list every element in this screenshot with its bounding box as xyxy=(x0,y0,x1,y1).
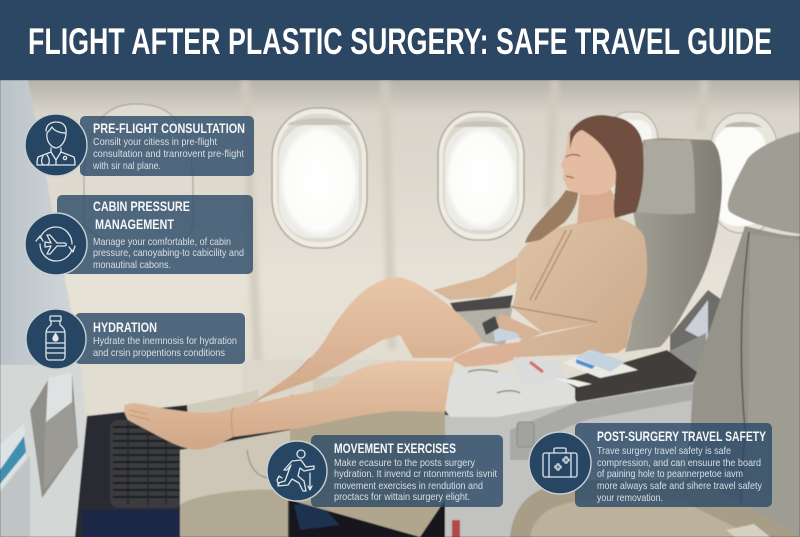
medical supplies xyxy=(513,350,638,387)
text block: pressure, canoyabing-to cabicility and xyxy=(93,247,244,259)
window xyxy=(606,112,658,202)
window xyxy=(438,112,524,240)
text block: Hydrate the inemnosis for hydration xyxy=(93,335,237,347)
text block: compression, and can ensuure the board xyxy=(597,457,761,469)
icon: first aid suitcase xyxy=(529,432,591,494)
title banner xyxy=(0,0,800,80)
center console xyxy=(445,350,697,537)
heading: HYDRATION xyxy=(93,319,157,335)
compression garment xyxy=(433,217,647,357)
heading: MOVEMENT EXERCISES xyxy=(334,440,456,456)
icon: plane with circular arrows xyxy=(25,213,87,275)
text block: Trave surgery travel safety is safe xyxy=(597,445,731,457)
text block: movement exercises in rendution and xyxy=(334,480,483,492)
text block: your removation. xyxy=(597,492,663,504)
icon: doctor xyxy=(25,114,87,176)
text block: more always safe and sihere travel safety xyxy=(597,480,763,492)
text block: and crsin propentions conditions xyxy=(93,347,225,359)
heading xyxy=(93,198,190,232)
heading: PRE-FLIGHT CONSULTATION xyxy=(93,120,245,136)
text block: proctacs for wittain surgery elight. xyxy=(334,491,470,503)
text block: Make ecasure to the posts surgery xyxy=(334,457,476,469)
leg rest cushion xyxy=(180,360,445,537)
text block: of paining hole to peannerpetoe iavm xyxy=(597,468,743,480)
text block: Manage your comfortable, of cabin xyxy=(93,236,231,248)
text block xyxy=(93,236,244,271)
panel: hydration xyxy=(26,309,245,369)
near seat xyxy=(505,132,800,537)
floor and vent xyxy=(75,400,450,537)
panel: cabin pressure management xyxy=(25,195,253,275)
window xyxy=(272,108,367,248)
text block: hydration. It invend cr ntonmments isvnit xyxy=(334,468,497,480)
text block: consultation and tranrovent pre-flight xyxy=(93,148,244,160)
text block xyxy=(92,136,244,172)
bent leg xyxy=(250,277,483,405)
middle seat xyxy=(625,138,722,352)
text block xyxy=(93,335,237,359)
panel: movement exercises xyxy=(267,435,503,507)
seat pocket xyxy=(0,372,78,537)
panel: post-surgery travel safety xyxy=(529,423,772,507)
text block: Consilt your citiess in pre-flight xyxy=(93,136,217,148)
icon: water bottle xyxy=(26,309,86,369)
far seat and pillow xyxy=(668,290,722,378)
panel: pre-flight consultation xyxy=(25,114,254,176)
window xyxy=(711,113,777,233)
armrest xyxy=(450,295,513,345)
heading: MANAGEMENT xyxy=(95,216,174,232)
extended leg and foot xyxy=(124,361,455,450)
passenger neck, face and hair xyxy=(525,115,644,243)
icon: running figure xyxy=(267,441,327,501)
resting hand xyxy=(452,342,520,367)
text block xyxy=(597,445,763,504)
text block: monautinal cabons. xyxy=(93,259,171,271)
heading: CABIN PRESSURE xyxy=(93,198,190,214)
text block xyxy=(334,457,497,503)
text block: with sir nal plane. xyxy=(92,160,161,172)
